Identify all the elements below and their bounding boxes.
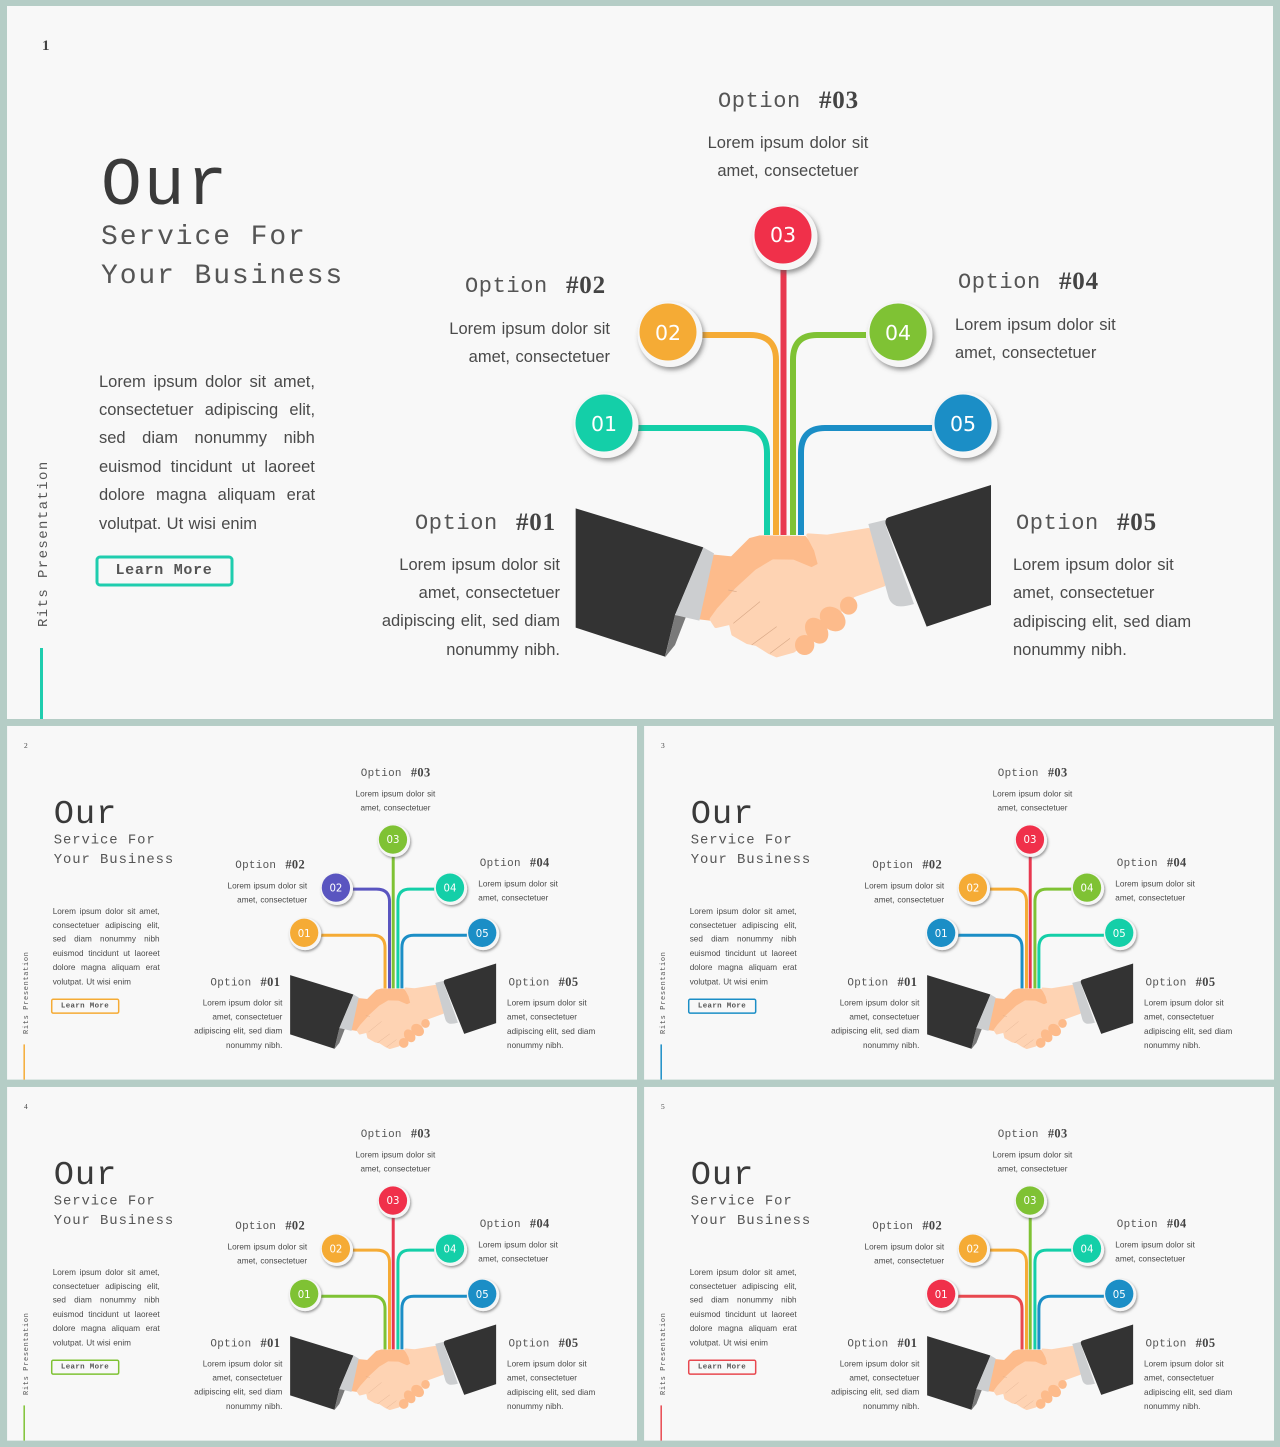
option 02 text: amet, consectetuer (237, 896, 307, 905)
title: Your Business (691, 852, 811, 868)
option 03 text: Option (718, 89, 801, 114)
badge 02: 02 (966, 1245, 979, 1256)
badge 02 (321, 873, 353, 905)
option 05 text: Lorem ipsum dolor sit (507, 999, 587, 1008)
body paragraph (99, 373, 315, 533)
badge 04 (435, 873, 467, 905)
body paragraph: euismod tincidunt ut laoreet (53, 1310, 160, 1319)
badge 03 (1015, 1186, 1047, 1218)
body paragraph: volutpat. Ut wisi enim (99, 515, 257, 533)
option 04 text: Lorem ipsum dolor sit (955, 316, 1116, 334)
slide 4 panel (7, 1087, 637, 1441)
body paragraph: Lorem ipsum dolor sit amet, (53, 1268, 160, 1277)
title (691, 1157, 811, 1229)
vertical label: Rits Presentation (36, 460, 52, 627)
option 05 text: #05 (559, 975, 578, 989)
body paragraph (53, 907, 160, 986)
title: Service For (691, 1194, 793, 1210)
body paragraph: consectetuer adipiscing elit, (99, 401, 315, 419)
body paragraph (690, 907, 797, 986)
learn more button (689, 999, 756, 1013)
option 02 text: Lorem ipsum dolor sit (228, 882, 308, 891)
badge 01 (289, 1279, 321, 1311)
option 05 text (1144, 975, 1232, 1050)
badge 05: 05 (1113, 929, 1126, 940)
option 02 text: Lorem ipsum dolor sit (449, 320, 610, 338)
option 05 text: nonummy nibh. (1144, 1402, 1200, 1411)
option 04 text (478, 1216, 559, 1264)
badge 04 (1072, 1234, 1104, 1266)
option 02 text: Lorem ipsum dolor sit (865, 882, 945, 891)
body paragraph: dolore magna aliquam erat (53, 1324, 160, 1333)
option 05 text: adipiscing elit, sed diam (1144, 1027, 1232, 1036)
option 05 text: amet, consectetuer (1144, 1013, 1214, 1022)
option 01 text: Option (847, 977, 889, 989)
badge 05 (467, 918, 499, 950)
option 05 text: adipiscing elit, sed diam (507, 1388, 595, 1397)
body paragraph: euismod tincidunt ut laoreet (690, 949, 797, 958)
option 01 text: amet, consectetuer (212, 1013, 283, 1022)
option 04 text: amet, consectetuer (1115, 1255, 1186, 1264)
title: Service For (54, 833, 156, 849)
body paragraph: consectetuer adipiscing elit, (690, 921, 797, 930)
option 01 text (831, 1336, 920, 1411)
option 03 text: amet, consectetuer (360, 803, 431, 812)
option 02 text: Option (872, 860, 913, 872)
connector lines (320, 852, 467, 988)
badge 05 (932, 393, 998, 458)
badge 03: 03 (1023, 1196, 1036, 1207)
slide 1 panel (7, 6, 1273, 719)
badge 04: 04 (444, 884, 456, 895)
slide background (7, 1087, 637, 1441)
option 04 text: #04 (1167, 855, 1187, 869)
option 01 text: Lorem ipsum dolor sit (840, 999, 920, 1008)
slide background (644, 726, 1274, 1080)
badge 01 (574, 393, 638, 458)
badge 02: 02 (329, 1245, 342, 1256)
title (691, 796, 811, 868)
badge 02 (958, 873, 990, 905)
title: Service For (691, 833, 793, 849)
body paragraph: volutpat. Ut wisi enim (690, 977, 768, 986)
body paragraph (53, 1268, 160, 1347)
option 05 text (1013, 509, 1191, 659)
badge 02: 02 (329, 884, 342, 895)
body paragraph: volutpat. Ut wisi enim (53, 1338, 131, 1347)
body paragraph: euismod tincidunt ut laoreet (53, 949, 160, 958)
option 04 text: #04 (530, 1216, 550, 1230)
badge 03 (378, 1186, 410, 1218)
option 05 text: #05 (559, 1336, 578, 1350)
option 02 text: amet, consectetuer (874, 1257, 944, 1266)
body paragraph: dolore magna aliquam erat (690, 963, 797, 972)
learn more button: Learn More (698, 1003, 746, 1011)
option 03 text: Lorem ipsum dolor sit (708, 134, 869, 152)
option 01 text: adipiscing elit, sed diam (831, 1026, 920, 1035)
option 04 text: Option (1117, 1219, 1158, 1231)
badge 05 (1104, 918, 1136, 950)
badge 03 (378, 825, 410, 857)
option 03 text: #03 (411, 766, 431, 780)
badge 05: 05 (950, 412, 976, 436)
title: Service For (54, 1194, 156, 1210)
badge 04: 04 (885, 321, 911, 345)
learn more button (52, 1360, 119, 1374)
vertical label: Rits Presentation (23, 951, 31, 1034)
body paragraph: Lorem ipsum dolor sit amet, (690, 907, 797, 916)
page number: 4 (24, 1102, 28, 1111)
title: Our (691, 1157, 754, 1195)
body paragraph: Lorem ipsum dolor sit amet, (99, 373, 315, 391)
badge 03: 03 (386, 835, 399, 846)
title: Your Business (101, 261, 344, 292)
option 01 text: amet, consectetuer (849, 1013, 920, 1022)
body paragraph: dolore magna aliquam erat (99, 486, 315, 504)
option 02 text (228, 857, 308, 905)
option 03 text: Option (361, 768, 402, 780)
option 04 text: #04 (1167, 1216, 1187, 1230)
option 05 text: Option (509, 1338, 550, 1350)
badge 02 (638, 302, 702, 367)
option 04 text: Lorem ipsum dolor sit (1115, 880, 1196, 889)
option 04 text: Option (958, 270, 1041, 295)
badge 01 (926, 1279, 958, 1311)
body paragraph: euismod tincidunt ut laoreet (690, 1310, 797, 1319)
body paragraph: dolore magna aliquam erat (690, 1324, 797, 1333)
option 02 text: Option (872, 1221, 913, 1233)
option 04 text (955, 268, 1116, 362)
option 01 text: Lorem ipsum dolor sit (203, 1360, 283, 1369)
option 01 text: adipiscing elit, sed diam (194, 1026, 283, 1035)
handshake illustration (576, 485, 991, 657)
option 04 text (478, 855, 559, 903)
badge 05: 05 (1113, 1290, 1126, 1301)
badge 04 (435, 1234, 467, 1266)
option 04 text: #04 (1059, 268, 1099, 295)
option 01 text: nonummy nibh. (446, 641, 560, 659)
title (101, 148, 344, 292)
option 05 text: nonummy nibh. (1013, 641, 1127, 659)
badge 01 (289, 918, 321, 950)
option 01 text: Option (210, 1338, 252, 1350)
badge 05 (467, 1279, 499, 1311)
slide background (7, 726, 637, 1080)
badge 01: 01 (591, 412, 617, 436)
learn more button: Learn More (698, 1364, 746, 1372)
slide 5 panel (644, 1087, 1274, 1441)
option 03 text (708, 87, 869, 180)
option 05 text: Option (509, 977, 550, 989)
option 01 text: Option (847, 1338, 889, 1350)
slide 2 panel (7, 726, 637, 1080)
option 04 text: Option (1117, 858, 1158, 870)
option 01 text: Option (415, 511, 498, 536)
option 03 text: Option (998, 768, 1039, 780)
option 03 text: amet, consectetuer (997, 803, 1068, 812)
vertical label: Rits Presentation (660, 951, 668, 1034)
option 03 text: #03 (411, 1127, 431, 1141)
body paragraph: euismod tincidunt ut laoreet (99, 458, 315, 476)
option 02 text (865, 1218, 945, 1266)
handshake illustration (927, 1325, 1133, 1410)
body paragraph: Lorem ipsum dolor sit amet, (690, 1268, 797, 1277)
option 01 text: #01 (898, 975, 917, 989)
option 03 text: #03 (1048, 1127, 1068, 1141)
option 05 text: #05 (1196, 1336, 1215, 1350)
option 01 text: nonummy nibh. (863, 1041, 919, 1050)
option 03 text: Lorem ipsum dolor sit (356, 1150, 436, 1159)
slide background (644, 1087, 1274, 1441)
option 02 text: amet, consectetuer (469, 348, 610, 366)
body paragraph: sed diam nonummy nibh (690, 1296, 797, 1305)
option 05 text: Lorem ipsum dolor sit (1144, 1360, 1224, 1369)
slide 3 panel (644, 726, 1274, 1080)
option 05 text: adipiscing elit, sed diam (1013, 613, 1191, 631)
option 02 text: Lorem ipsum dolor sit (228, 1243, 308, 1252)
badge 03: 03 (770, 223, 796, 247)
vertical label: Rits Presentation (23, 1312, 31, 1395)
option 02 text: amet, consectetuer (874, 896, 944, 905)
page number: 3 (661, 741, 665, 750)
learn more button (689, 1360, 756, 1374)
badge 05: 05 (476, 929, 489, 940)
learn more button (52, 999, 119, 1013)
option 01 text: nonummy nibh. (226, 1041, 282, 1050)
connector lines (957, 1213, 1104, 1349)
option 05 text: Option (1146, 1338, 1187, 1350)
option 01 text: Lorem ipsum dolor sit (203, 999, 283, 1008)
option 05 text: #05 (1117, 509, 1157, 536)
option 01 text: amet, consectetuer (212, 1374, 283, 1383)
badge 03 (752, 205, 818, 270)
body paragraph: dolore magna aliquam erat (53, 963, 160, 972)
body paragraph: volutpat. Ut wisi enim (690, 1338, 768, 1347)
option 01 text: adipiscing elit, sed diam (194, 1387, 283, 1396)
option 05 text: Lorem ipsum dolor sit (1013, 556, 1174, 574)
learn more button (97, 557, 232, 585)
option 01 text: #01 (516, 509, 556, 536)
option 02 text (449, 272, 610, 366)
badge 02: 02 (655, 321, 681, 345)
body paragraph: sed diam nonummy nibh (99, 429, 315, 447)
option 03 text (993, 766, 1073, 812)
option 02 text: Option (235, 1221, 276, 1233)
option 01 text: amet, consectetuer (419, 584, 560, 602)
option 05 text: nonummy nibh. (1144, 1041, 1200, 1050)
option 05 text: #05 (1196, 975, 1215, 989)
option 03 text (993, 1127, 1073, 1173)
badge 02 (958, 1234, 990, 1266)
option 03 text: amet, consectetuer (717, 162, 859, 180)
option 03 text: amet, consectetuer (360, 1164, 431, 1173)
option 03 text: Lorem ipsum dolor sit (356, 789, 436, 798)
option 02 text (865, 857, 945, 905)
option 02 text: #02 (285, 857, 305, 871)
option 01 text: #01 (898, 1336, 917, 1350)
badge 03: 03 (1023, 835, 1036, 846)
option 05 text: Option (1016, 511, 1099, 536)
option 05 text: Lorem ipsum dolor sit (507, 1360, 587, 1369)
badge 02: 02 (966, 884, 979, 895)
connector lines (320, 1213, 467, 1349)
badge 02 (321, 1234, 353, 1266)
option 03 text: amet, consectetuer (997, 1164, 1068, 1173)
slide background (7, 6, 1273, 719)
option 04 text: amet, consectetuer (1115, 894, 1186, 903)
option 02 text: #02 (922, 857, 942, 871)
option 01 text: adipiscing elit, sed diam (831, 1387, 920, 1396)
option 03 text (356, 766, 436, 812)
option 02 text: #02 (922, 1218, 942, 1232)
badge 01: 01 (298, 929, 311, 940)
badge 01: 01 (935, 929, 948, 940)
badge 04 (1072, 873, 1104, 905)
option 05 text: nonummy nibh. (507, 1041, 563, 1050)
option 04 text (1115, 855, 1196, 903)
handshake illustration (927, 964, 1133, 1049)
body paragraph: consectetuer adipiscing elit, (53, 921, 160, 930)
option 01 text: Lorem ipsum dolor sit (840, 1360, 920, 1369)
option 04 text: amet, consectetuer (478, 1255, 549, 1264)
title: Your Business (54, 1213, 174, 1229)
option 04 text: amet, consectetuer (478, 894, 549, 903)
body paragraph: consectetuer adipiscing elit, (690, 1282, 797, 1291)
option 04 text: Option (480, 858, 521, 870)
accent line (660, 1044, 662, 1080)
option 01 text: nonummy nibh. (226, 1402, 282, 1411)
badge 05: 05 (476, 1290, 489, 1301)
badge 04: 04 (1081, 1245, 1093, 1256)
option 05 text: amet, consectetuer (507, 1013, 577, 1022)
accent line (23, 1044, 25, 1080)
page number: 1 (42, 38, 50, 54)
learn more button: Learn More (61, 1364, 109, 1372)
badge 04: 04 (444, 1245, 456, 1256)
body paragraph: sed diam nonummy nibh (53, 1296, 160, 1305)
page number: 2 (24, 741, 28, 750)
title (54, 796, 174, 868)
title: Our (691, 796, 754, 834)
vertical label: Rits Presentation (660, 1312, 668, 1395)
badge 01 (926, 918, 958, 950)
option 03 text: Option (361, 1129, 402, 1141)
option 05 text: adipiscing elit, sed diam (507, 1027, 595, 1036)
badge 03: 03 (386, 1196, 399, 1207)
option 03 text: #03 (1048, 766, 1068, 780)
option 05 text: adipiscing elit, sed diam (1144, 1388, 1232, 1397)
option 01 text: amet, consectetuer (849, 1374, 920, 1383)
accent line (23, 1405, 25, 1441)
option 04 text: #04 (530, 855, 550, 869)
option 03 text: Lorem ipsum dolor sit (993, 789, 1073, 798)
connector lines (957, 852, 1104, 988)
option 02 text: #02 (566, 272, 606, 299)
option 01 text (382, 509, 560, 659)
handshake illustration (290, 964, 496, 1049)
option 03 text: Option (998, 1129, 1039, 1141)
option 01 text: nonummy nibh. (863, 1402, 919, 1411)
title: Your Business (691, 1213, 811, 1229)
badge 03 (1015, 825, 1047, 857)
option 01 text: Option (210, 977, 252, 989)
option 02 text: #02 (285, 1218, 305, 1232)
body paragraph (690, 1268, 797, 1347)
option 02 text: amet, consectetuer (237, 1257, 307, 1266)
badge 04: 04 (1081, 884, 1093, 895)
option 02 text: Option (235, 860, 276, 872)
option 01 text (194, 975, 283, 1050)
option 05 text (1144, 1336, 1232, 1411)
option 05 text (507, 1336, 595, 1411)
option 04 text (1115, 1216, 1196, 1264)
body paragraph: sed diam nonummy nibh (690, 935, 797, 944)
title: Service For (101, 222, 307, 253)
body paragraph: Lorem ipsum dolor sit amet, (53, 907, 160, 916)
body paragraph: volutpat. Ut wisi enim (53, 977, 131, 986)
option 02 text: Lorem ipsum dolor sit (865, 1243, 945, 1252)
body paragraph: consectetuer adipiscing elit, (53, 1282, 160, 1291)
option 05 text: amet, consectetuer (1013, 584, 1155, 602)
option 05 text: Lorem ipsum dolor sit (1144, 999, 1224, 1008)
option 01 text: #01 (261, 975, 280, 989)
title: Our (54, 1157, 117, 1195)
title: Our (101, 148, 229, 225)
option 03 text: Lorem ipsum dolor sit (993, 1150, 1073, 1159)
option 04 text: Lorem ipsum dolor sit (1115, 1241, 1196, 1250)
option 05 text: nonummy nibh. (507, 1402, 563, 1411)
title: Your Business (54, 852, 174, 868)
option 01 text: #01 (261, 1336, 280, 1350)
option 02 text: Option (465, 274, 548, 299)
title: Our (54, 796, 117, 834)
option 04 text: Lorem ipsum dolor sit (478, 880, 559, 889)
option 03 text: #03 (819, 87, 859, 114)
option 05 text: amet, consectetuer (507, 1374, 577, 1383)
title (54, 1157, 174, 1229)
learn more button: Learn More (115, 562, 213, 579)
badge 01: 01 (298, 1290, 311, 1301)
body paragraph: sed diam nonummy nibh (53, 935, 160, 944)
accent line (40, 648, 43, 719)
option 03 text (356, 1127, 436, 1173)
handshake illustration (290, 1325, 496, 1410)
option 01 text: adipiscing elit, sed diam (382, 612, 560, 630)
option 01 text: Lorem ipsum dolor sit (399, 556, 560, 574)
option 05 text: Option (1146, 977, 1187, 989)
option 01 text (194, 1336, 283, 1411)
badge 05 (1104, 1279, 1136, 1311)
option 04 text: Lorem ipsum dolor sit (478, 1241, 559, 1250)
option 04 text: Option (480, 1219, 521, 1231)
accent line (660, 1405, 662, 1441)
badge 04 (868, 302, 932, 367)
option 05 text: amet, consectetuer (1144, 1374, 1214, 1383)
page number: 5 (661, 1102, 665, 1111)
option 01 text (831, 975, 920, 1050)
learn more button: Learn More (61, 1003, 109, 1011)
badge 01: 01 (935, 1290, 948, 1301)
option 05 text (507, 975, 595, 1050)
option 04 text: amet, consectetuer (955, 344, 1097, 362)
option 02 text (228, 1218, 308, 1266)
connector lines (636, 260, 932, 535)
